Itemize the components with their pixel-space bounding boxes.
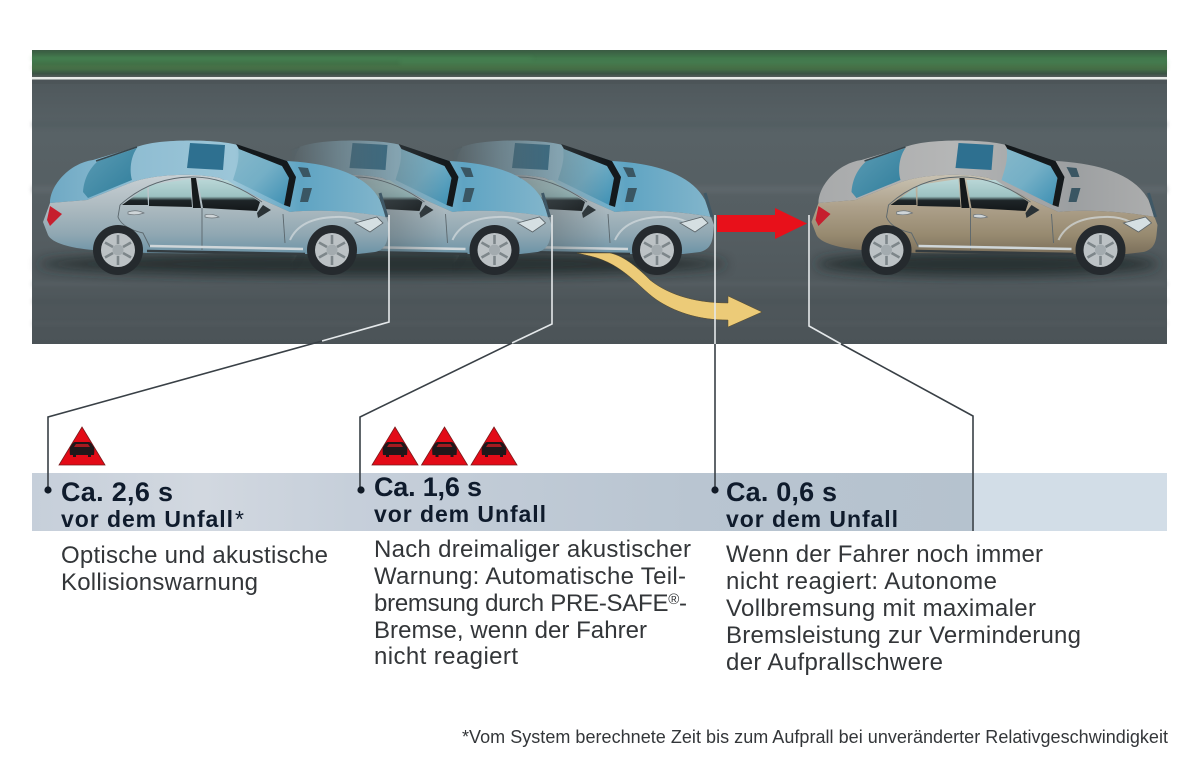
- stage 3 description: Bremsleistung zur Verminderung: [726, 622, 1081, 649]
- stage 2 description: Nach dreimaliger akustischer: [374, 536, 691, 563]
- leader line 2: [357, 215, 552, 494]
- stage 2 heading: vor dem Unfall: [374, 501, 546, 527]
- stage 2 heading: [374, 472, 546, 527]
- leader line 4: [809, 215, 973, 531]
- stage 3 heading: [726, 477, 898, 532]
- stage 3 description: der Aufprallschwere: [726, 649, 943, 676]
- icon: one warning triangle: [59, 427, 105, 465]
- car 3: braking stage: [462, 140, 714, 275]
- stage 2 description: Bremse, wenn der Fahrer: [374, 617, 647, 644]
- red arrow: distance to car ahead: [717, 208, 807, 239]
- car ahead: champagne sedan: [812, 140, 1158, 275]
- leader line 1: [44, 215, 389, 494]
- stage 1 description: Optische und akustische: [61, 542, 328, 569]
- car 2: warning stage: [300, 140, 552, 275]
- stage 2 description: [374, 536, 691, 670]
- stage 3 description: nicht reagiert: Autonome: [726, 568, 997, 595]
- footnote: *Vom System berechnete Zeit bis zum Aufprall bei unveränderter Relativgeschwindigkeit: [462, 727, 1168, 747]
- stage 2 description: nicht reagiert: [374, 643, 518, 670]
- stage 2 description: bremsung durch PRE-SAFE: [374, 590, 668, 617]
- timeline band: [32, 473, 1167, 531]
- road photo background: [32, 50, 1167, 344]
- white road edge line: [32, 77, 1167, 80]
- stage 1 description: [61, 542, 328, 596]
- stage 1 heading: vor dem Unfall: [61, 506, 233, 532]
- stage 3 description: [726, 541, 1081, 676]
- leader line 3: [711, 215, 719, 494]
- stage 1 description: Kollisionswarnung: [61, 569, 258, 596]
- stage 2 heading: Ca. 1,6 s: [374, 472, 482, 502]
- stage 3 heading: vor dem Unfall: [726, 506, 898, 532]
- stage 3 description: Vollbremsung mit maximaler: [726, 595, 1036, 622]
- stage 1 heading: Ca. 2,6 s: [61, 477, 173, 507]
- yellow arrow: braking path: [577, 253, 762, 327]
- stage 1 heading: *: [235, 506, 244, 532]
- car 1: first warning: [43, 140, 389, 275]
- stage 2 description: ®: [668, 591, 679, 608]
- road surface: [32, 80, 1167, 344]
- icon: three warning triangles: [372, 427, 517, 465]
- stage 2 description: -: [679, 590, 687, 617]
- stage 3 description: Wenn der Fahrer noch immer: [726, 541, 1043, 568]
- stage 1 heading: [61, 477, 244, 532]
- stage 2 description: Warnung: Automatische Teil-: [374, 563, 686, 590]
- grass strip: [32, 50, 1167, 77]
- stage 3 heading: Ca. 0,6 s: [726, 477, 837, 507]
